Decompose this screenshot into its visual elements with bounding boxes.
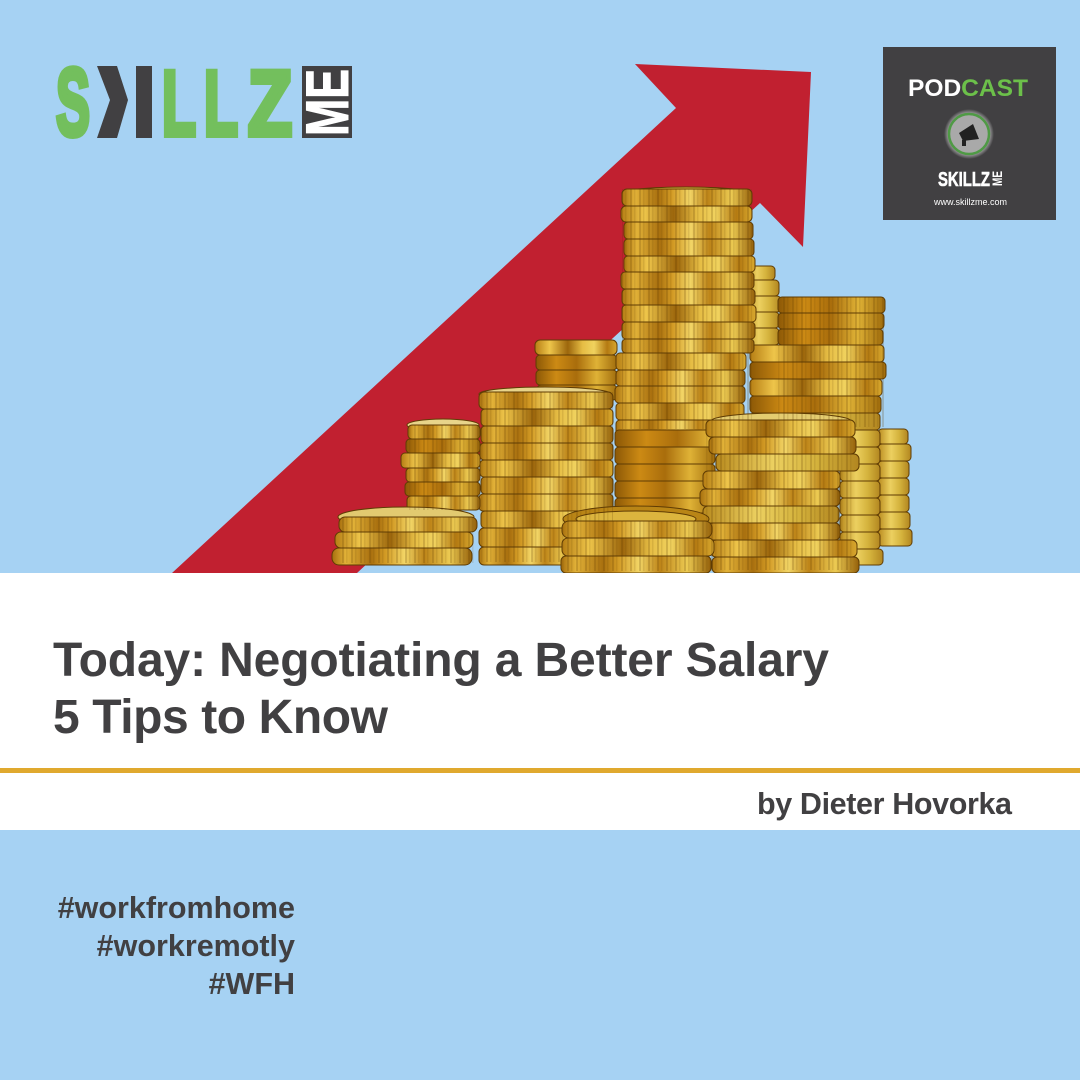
title bbox=[53, 634, 829, 744]
logo letter L: L bbox=[204, 53, 238, 155]
logo letter L: L bbox=[162, 53, 196, 155]
hashtag 2: #workremotly bbox=[97, 929, 295, 963]
title line 1: Today: Negotiating a Better Salary bbox=[53, 634, 829, 687]
coin stack: small back stack bbox=[745, 266, 781, 345]
hashtag 1: #workfromhome bbox=[58, 891, 295, 925]
badge mini ME: ME bbox=[989, 171, 1005, 186]
logo letter S: S bbox=[56, 49, 90, 156]
logo letter I bbox=[136, 66, 152, 138]
podcast badge bbox=[883, 47, 1056, 220]
logo ME rotated: ME bbox=[294, 69, 361, 136]
icon: megaphone bbox=[944, 109, 994, 159]
hashtags bbox=[58, 891, 295, 1001]
red rising arrow bbox=[172, 64, 811, 573]
coin stack: bottom centre bbox=[561, 506, 714, 573]
badge url: www.skillzme.com bbox=[933, 197, 1007, 207]
coin ribbing bbox=[339, 189, 885, 571]
title line 2: 5 Tips to Know bbox=[53, 691, 389, 744]
coin stack: left middle bbox=[479, 387, 613, 565]
coin stack: tall centre bbox=[615, 187, 756, 437]
coin stack: left small bbox=[401, 419, 480, 510]
logo letter Z: Z bbox=[248, 53, 292, 155]
logo: SKILLZ ME bbox=[56, 49, 361, 156]
coin stack: left of centre, top bbox=[535, 340, 617, 400]
coin stack: far right bbox=[840, 429, 912, 565]
logo ME box bbox=[302, 66, 352, 138]
badge background bbox=[883, 47, 1056, 220]
hashtag 3: #WFH bbox=[209, 967, 295, 1001]
coin stack: bottom left bbox=[332, 507, 477, 565]
white title band bbox=[0, 573, 1080, 830]
badge mini logo: SKILLZ bbox=[938, 169, 990, 191]
badge heading: PODCAST bbox=[908, 75, 1028, 102]
logo chevron bbox=[97, 66, 128, 138]
coin stack: front right bbox=[700, 413, 859, 573]
author byline: by Dieter Hovorka bbox=[757, 787, 1013, 821]
gold coin stacks bbox=[332, 187, 912, 573]
coin stack: right back bbox=[750, 297, 886, 430]
gold divider bbox=[0, 768, 1080, 773]
